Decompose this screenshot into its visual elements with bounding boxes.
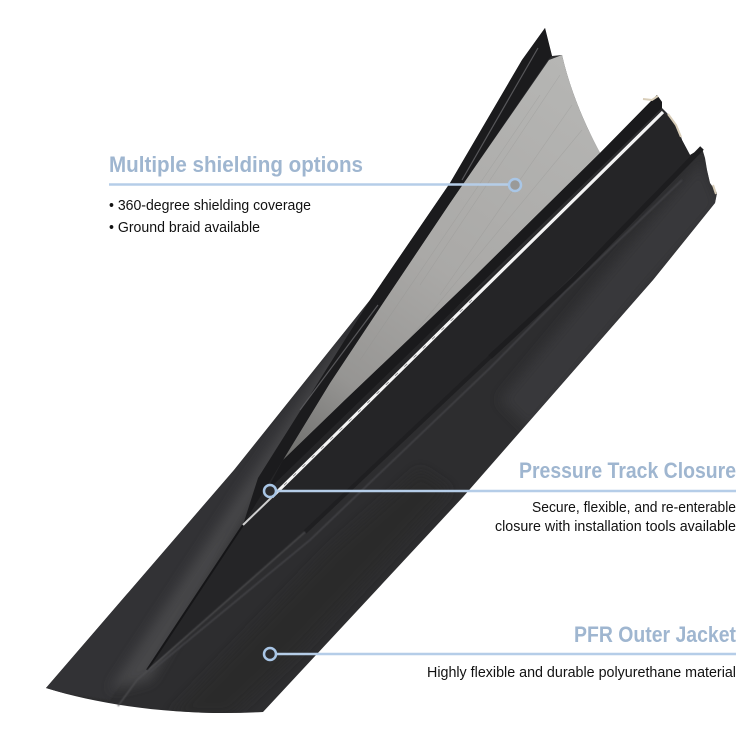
black flap over mesh bbox=[243, 28, 552, 525]
frayed mesh edge at sleeve end bbox=[643, 96, 716, 194]
description line one: Secure, flexible, and re-enterable bbox=[532, 500, 736, 516]
callout: multiple shielding options bbox=[109, 152, 521, 236]
leader line bbox=[275, 653, 736, 655]
jacket shading bands bbox=[40, 112, 720, 716]
description: Highly flexible and durable polyurethane material bbox=[427, 665, 736, 681]
mesh weave texture bbox=[360, 75, 582, 360]
callout: pressure track closure bbox=[264, 458, 736, 535]
bullet two: • Ground braid available bbox=[109, 220, 260, 236]
leader line bbox=[275, 490, 736, 492]
panel: grey shielding mesh bbox=[283, 55, 600, 460]
marker bbox=[264, 485, 276, 497]
callout: PFR outer jacket bbox=[264, 622, 737, 681]
ridge of pressure track bbox=[118, 148, 702, 706]
description line two: closure with installation tools available bbox=[495, 519, 736, 535]
leader line bbox=[109, 183, 510, 186]
flap highlights bbox=[147, 48, 538, 670]
bullet one: • 360-degree shielding coverage bbox=[109, 198, 311, 214]
marker bbox=[509, 179, 521, 191]
marker bbox=[264, 648, 276, 660]
white zipper track bbox=[243, 112, 663, 525]
heading: Multiple shielding options bbox=[109, 152, 363, 177]
upper closure lip bbox=[266, 95, 662, 492]
